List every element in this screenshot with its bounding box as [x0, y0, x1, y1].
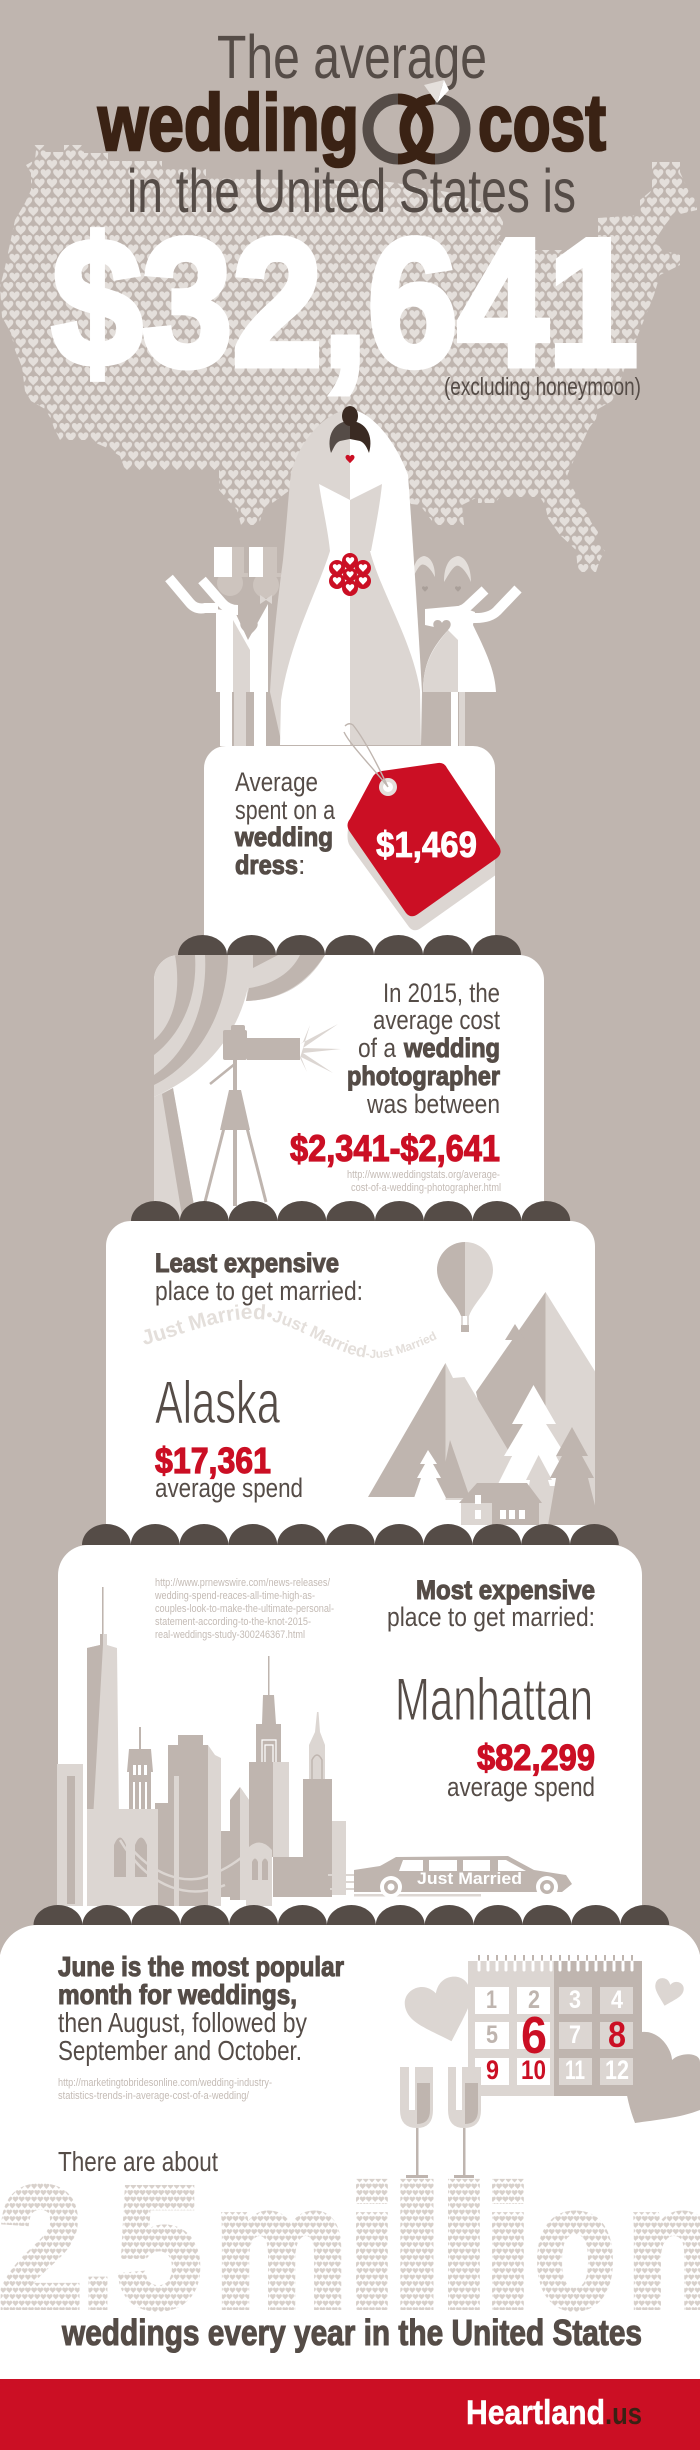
big heart-pattern number: 2.5 million: o: [535, 2153, 615, 2343]
icon: champagne glasses: [400, 2067, 481, 2178]
text: average spent on a wedding dress: [234, 767, 336, 880]
text: June most popular month: then August, followed by: [58, 2007, 307, 2038]
text: average spent on a wedding dress: wedding: [234, 822, 333, 852]
text: average spent on a wedding dress: dress: [235, 850, 298, 880]
big average cost figure: $32,641: [52, 202, 638, 404]
text: average spent on a wedding dress: :: [298, 850, 306, 880]
text: photographer statement: wedding: [403, 1033, 500, 1063]
illustration: mountains, trees and cabin: [368, 1292, 600, 1525]
spend figure: average spend: [155, 1473, 303, 1503]
title: cost: [478, 78, 606, 167]
text: most expensive heading: [387, 1575, 595, 1632]
price: $1,469: [376, 824, 477, 865]
big heart-pattern number: 2.5 million: .: [84, 2153, 112, 2343]
bridesmaids figures: [413, 556, 518, 746]
icon: just married limousine: [328, 1856, 572, 1898]
illustration: New York skyline: [57, 1587, 346, 1906]
big heart-pattern number: 2.5 million: i: [484, 2153, 532, 2343]
text: photographer statement: photographer: [347, 1061, 500, 1091]
illustration: stage curtain: [154, 955, 325, 1222]
big heart-pattern number: 2.5 million: l: [440, 2153, 488, 2343]
text: photographer statement: [347, 978, 500, 1119]
curved banner text: just married: Just Married•Just Married-Just Married: [143, 1304, 437, 1358]
panel: wedding dress cost tier: [204, 724, 504, 956]
text: most expensive heading: Most expensive: [416, 1575, 595, 1605]
groomsmen figures: [169, 547, 281, 746]
icon: hot air balloon: [437, 1242, 493, 1332]
icon: red heart bouquet: [329, 553, 371, 596]
text: June most popular month: month for weddings,: [58, 1979, 297, 2010]
source link: [154, 1577, 334, 1641]
source link: real-weddings-study-300246367.html: [155, 1629, 305, 1641]
icons: hearts behind calendar: [401, 1972, 700, 2123]
icon: calendar of wedding months: 12: [605, 2055, 629, 2085]
panel: most expensive place tier: [57, 1545, 642, 1926]
big heart-pattern number: 2.5 million: l: [392, 2153, 442, 2343]
icon: camera on tripod: [205, 1024, 341, 1206]
icon: red price tag: [344, 724, 504, 930]
big heart-pattern number: 2.5 million: m: [215, 2153, 347, 2343]
big heart-pattern number: 2.5 million: 2: [0, 2153, 82, 2343]
icon: calendar of wedding months: 7: [569, 2021, 581, 2049]
source link: statement-according-to-the-knot-2015-: [155, 1616, 311, 1628]
source link: wedding-spend-reaces-all-time-high-as-: [154, 1590, 315, 1602]
spend figure: $82,299: [477, 1737, 595, 1778]
text: photographer statement: of a: [358, 1033, 397, 1063]
icon: lips heart: [346, 455, 354, 463]
source link: http://marketingtobridesonline.com/wedding-industry-: [58, 2077, 272, 2089]
icon: just married limousine: Just Married: [417, 1869, 522, 1888]
text: photographer statement: average cost: [373, 1005, 500, 1035]
text: June most popular month: June is the most popular: [58, 1951, 344, 1982]
big heart-pattern number: 2.5 million: [0, 2153, 700, 2343]
spend figure: [447, 1737, 595, 1802]
text: average spent on a wedding dress: Average: [235, 767, 318, 797]
price range: $2,341-$2,641: [290, 1128, 500, 1169]
icon: wedding rings with diamond: [368, 80, 465, 159]
source link: cost-of-a-wedding-photographer.html: [351, 1182, 501, 1194]
spend figure: $17,361: [155, 1440, 271, 1481]
source link: statistics-trends-in-average-cost-of-a-wedding/: [58, 2090, 250, 2102]
source link: http://www.prnewswire.com/news-releases/: [155, 1577, 331, 1589]
panel: popular months and annual weddings tier: [0, 1925, 700, 2380]
panel: photographer cost tier: [154, 955, 544, 1222]
icon: calendar of wedding months: 10: [521, 2055, 546, 2085]
logo: Heartland.us: Heartland: [466, 2394, 605, 2432]
note: excluding honeymoon: (excluding honeymoon): [444, 373, 641, 401]
icon: calendar of wedding months: 1: [486, 1986, 497, 2014]
text: average spent on a wedding dress: spent on a: [235, 795, 336, 825]
icon: calendar of wedding months: 8: [608, 2014, 626, 2055]
icon: calendar of wedding months: 11: [565, 2055, 585, 2085]
source link: couples-look-to-make-the-ultimate-personal-: [155, 1603, 334, 1615]
source link: [347, 1169, 501, 1194]
bride figure: [270, 406, 422, 745]
icon: calendar of wedding months: 6: [521, 2007, 547, 2065]
logo: Heartland.us: .us: [605, 2396, 642, 2431]
title: The average: [217, 23, 487, 91]
text: least expensive heading: Least expensive: [155, 1248, 339, 1278]
icon: calendar of wedding months: 5: [486, 2021, 498, 2049]
icon: calendar of wedding months: [468, 1955, 642, 2096]
spend figure: [155, 1440, 303, 1503]
icon: calendar of wedding months: 3: [569, 1986, 581, 2014]
spend figure: average spend: [447, 1772, 595, 1802]
source link: [58, 2077, 272, 2102]
icon: calendar of wedding months: 9: [486, 2055, 499, 2085]
title: wedding: [97, 78, 359, 167]
hair: [330, 406, 370, 453]
scallop trim rows: [34, 935, 669, 1925]
text: photographer statement: In 2015, the: [383, 978, 500, 1008]
big heart-pattern number: 2.5 million: i: [348, 2153, 396, 2343]
text: photographer statement: was between: [366, 1089, 500, 1119]
source link: http://www.weddingstats.org/average-: [347, 1169, 500, 1181]
big heart-pattern number: 2.5 million: 5: [117, 2153, 201, 2343]
icon: calendar of wedding months: 4: [611, 1986, 623, 2014]
title: [97, 23, 606, 225]
text: June most popular month: [58, 1951, 344, 2066]
place name: Manhattan: Manhattan: [395, 1666, 593, 1733]
footer band with logo: [0, 2379, 700, 2450]
place name: Alaska: Alaska: [155, 1369, 280, 1436]
heart-pattern map of the United States: [0, 140, 700, 580]
text: most expensive heading: place to get married:: [387, 1602, 595, 1632]
panel: least expensive place tier: [106, 1221, 595, 1545]
text: least expensive heading: place to get married:: [155, 1276, 363, 1306]
icon: calendar of wedding months: 2: [528, 1986, 540, 2014]
text: June most popular month: September and October.: [58, 2035, 302, 2066]
text: least expensive heading: [155, 1248, 363, 1306]
text: there are about: There are about: [58, 2146, 218, 2177]
